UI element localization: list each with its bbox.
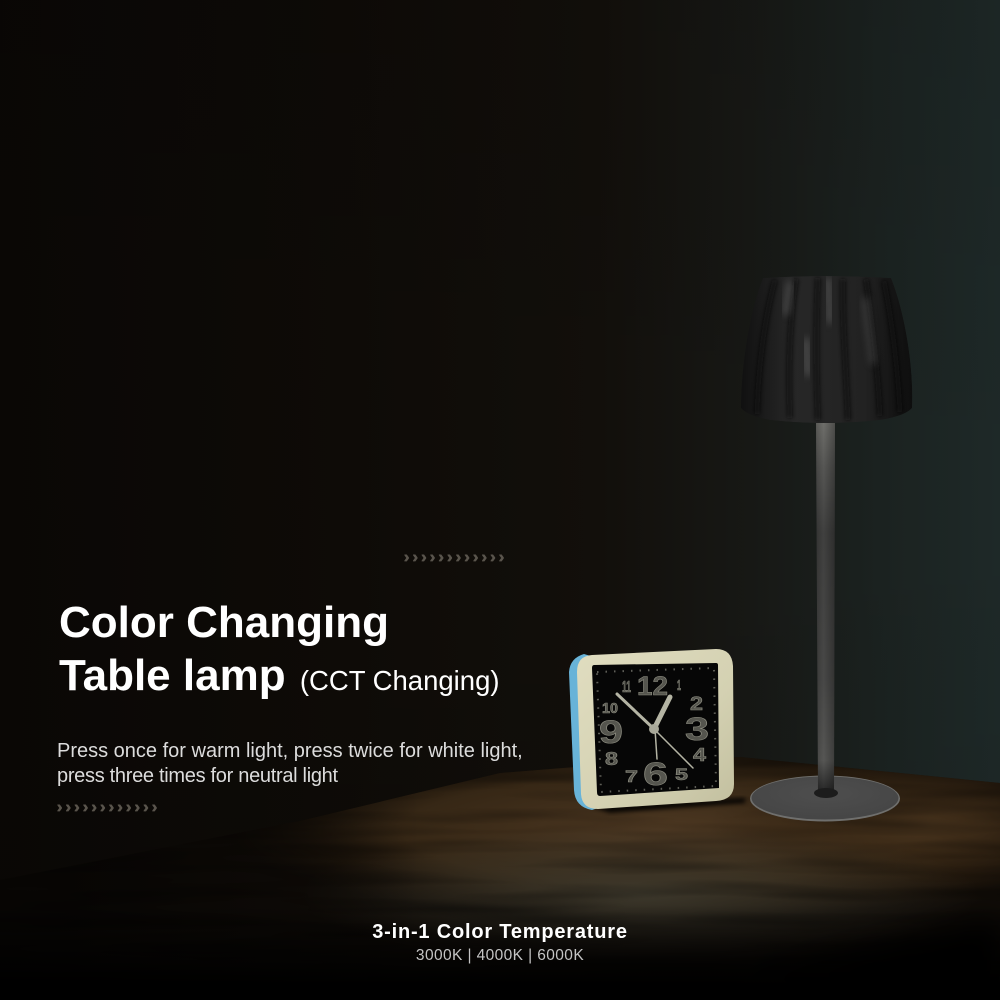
description text	[57, 740, 523, 787]
arrows: top chevron row: ››››››››››››	[404, 549, 508, 566]
icon: table lamp	[741, 276, 912, 822]
arrows: bottom chevron row: ››››››››››››	[57, 799, 161, 816]
wooden table	[0, 750, 1000, 1000]
color temperature heading: 3-in-1 Color Temperature	[372, 921, 628, 943]
clock numerals: 2	[690, 694, 703, 715]
clock numerals: 7	[625, 767, 638, 786]
description text: press three times for neutral light	[57, 765, 338, 787]
clock numerals: 11	[622, 679, 631, 696]
clock numerals	[599, 671, 709, 792]
clock numerals: 6	[643, 756, 668, 792]
clock numerals: 5	[675, 765, 688, 784]
clock numerals: 4	[693, 745, 706, 765]
lamp pole	[814, 423, 838, 798]
lamp shade	[741, 276, 912, 423]
title: Color Changing	[59, 598, 389, 647]
color temperature values: 3000K | 4000K | 6000K	[416, 947, 584, 964]
clock numerals: 12	[637, 671, 668, 701]
clock numerals: 1	[677, 677, 681, 694]
clock numerals: 8	[605, 749, 618, 769]
description text: Press once for warm light, press twice for white light,	[57, 740, 523, 762]
lamp base	[750, 776, 900, 822]
clock numerals: 10	[602, 700, 618, 717]
title	[59, 598, 500, 700]
clock numerals: 9	[599, 714, 623, 750]
title: Table lamp (CCT Changing)	[59, 651, 500, 700]
clock numerals: 3	[685, 711, 709, 747]
icon: alarm clock	[569, 649, 745, 813]
clock hands	[617, 694, 693, 768]
